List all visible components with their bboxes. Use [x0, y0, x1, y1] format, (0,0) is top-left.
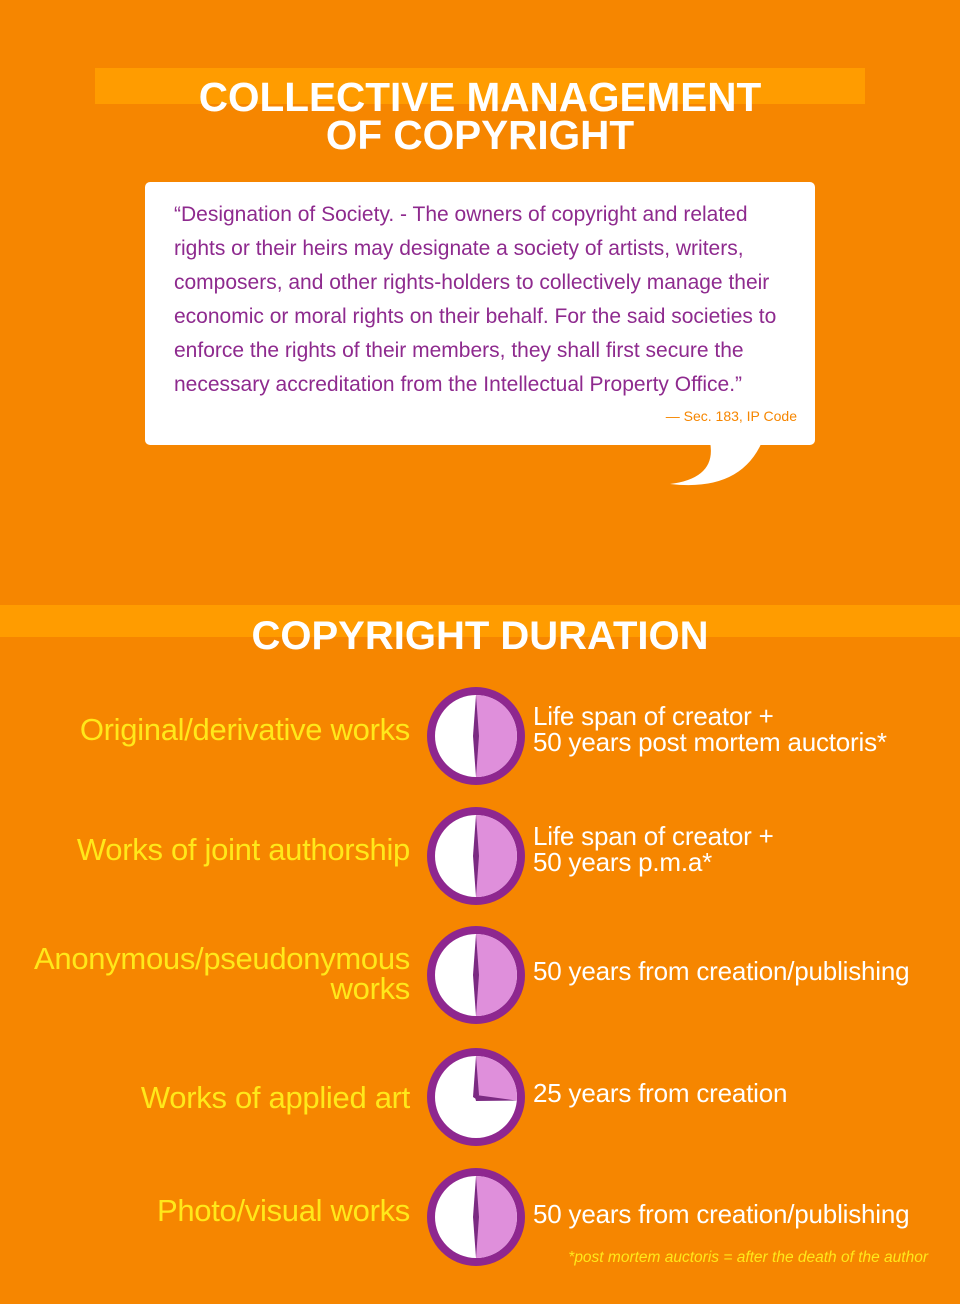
label	[34, 941, 410, 1006]
citation: — Sec. 183, IP Code	[666, 408, 797, 424]
row 3	[34, 926, 909, 1024]
duration: 25 years from creation	[533, 1078, 787, 1108]
quote text: composers, and other rights-holders to collectively manage their	[174, 271, 769, 294]
title: OF COPYRIGHT	[326, 112, 634, 158]
label: Works of joint authorship	[77, 832, 410, 867]
label: Original/derivative works	[80, 712, 410, 747]
duration band	[0, 605, 960, 637]
label: works	[331, 971, 410, 1006]
row 2	[77, 807, 774, 905]
quote box	[145, 182, 815, 486]
duration: 50 years p.m.a*	[533, 847, 712, 877]
title: COLLECTIVE MANAGEMENT	[199, 74, 761, 120]
quote text: “Designation of Society. - The owners of copyright and related	[174, 203, 748, 226]
clock icon	[427, 926, 525, 1024]
speech bubble	[145, 182, 815, 486]
duration	[533, 821, 774, 877]
quote text: rights or their heirs may designate a society of artists, writers,	[174, 237, 744, 260]
label: Works of applied art	[141, 1080, 410, 1115]
label: Anonymous/pseudonymous	[34, 941, 410, 976]
clock icon	[427, 687, 525, 785]
duration title: COPYRIGHT DURATION	[251, 614, 709, 658]
quote text: necessary accreditation from the Intellectual Property Office.”	[174, 373, 742, 396]
duration: 50 years from creation/publishing	[533, 956, 909, 986]
duration: 50 years from creation/publishing	[533, 1199, 909, 1229]
clock icon	[427, 1048, 525, 1146]
duration: Life span of creator +	[533, 821, 774, 851]
duration	[533, 701, 887, 757]
clock icon	[427, 807, 525, 905]
quote text: economic or moral rights on their behalf. For the said societies to	[174, 305, 776, 328]
row 1	[80, 687, 887, 785]
duration: 50 years post mortem auctoris*	[533, 727, 887, 757]
footnote: *post mortem auctoris = after the death of the author	[568, 1249, 928, 1266]
title band	[95, 68, 865, 104]
title	[199, 74, 761, 158]
duration: Life span of creator +	[533, 701, 774, 731]
clock icon	[427, 1168, 525, 1266]
label: Photo/visual works	[157, 1193, 410, 1228]
quote text	[174, 203, 776, 396]
row 4	[141, 1048, 787, 1146]
row 5	[157, 1168, 909, 1266]
quote text: enforce the rights of their members, they shall first secure the	[174, 339, 744, 362]
